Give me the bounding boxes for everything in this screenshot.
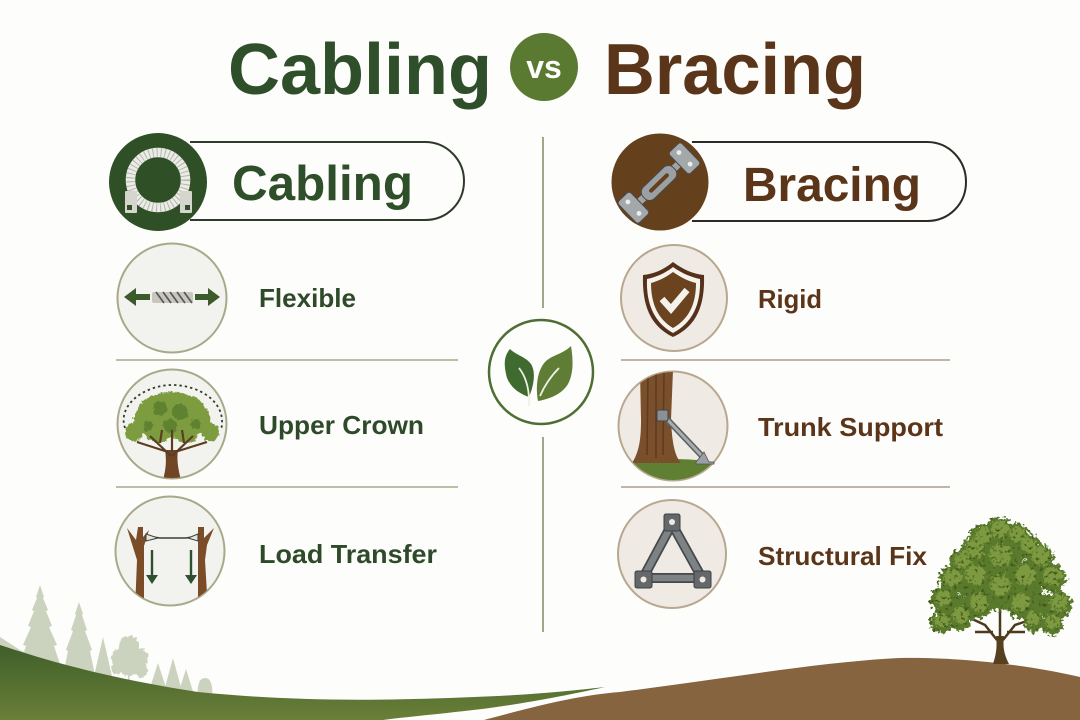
icon: triangle brace [618, 500, 726, 608]
row: structural fix: Structural Fix [758, 541, 928, 571]
panel: cabling [109, 133, 464, 610]
title: Cabling [228, 30, 492, 110]
vs badge [510, 33, 578, 101]
ground: green hill [0, 645, 605, 720]
row: trunk support [615, 370, 943, 490]
icon: load transfer [116, 496, 224, 610]
row: structural fix [618, 500, 928, 608]
panel: bracing [612, 134, 966, 608]
row: flexible [118, 244, 356, 352]
icon: shield [621, 245, 727, 351]
row: trunk support: Trunk Support [758, 412, 943, 442]
icon: leaves [489, 320, 593, 424]
cabling header: Cabling [232, 157, 413, 211]
row: upper crown [118, 370, 424, 480]
centre divider [542, 137, 544, 632]
ground: brown hill [484, 658, 1080, 720]
background forest silhouettes [0, 585, 212, 704]
row: rigid [621, 245, 822, 351]
row: flexible: Flexible [259, 283, 356, 313]
icon: turnbuckle [612, 134, 708, 230]
cabling header [109, 133, 464, 231]
row: load transfer [116, 496, 437, 610]
illustration: large tree [930, 517, 1072, 664]
row: load transfer: Load Transfer [259, 539, 437, 569]
title [228, 30, 866, 110]
row: rigid: Rigid [758, 284, 822, 314]
icon: cable coil [109, 133, 207, 231]
icon: tree crown [118, 370, 226, 480]
bracing header [612, 134, 966, 230]
row: upper crown: Upper Crown [259, 410, 424, 440]
bracing header: Bracing [743, 159, 921, 212]
title: Bracing [604, 30, 866, 110]
icon: trunk brace [618, 370, 728, 482]
vs badge: vs [526, 49, 562, 85]
icon: flexible cable [118, 244, 226, 352]
